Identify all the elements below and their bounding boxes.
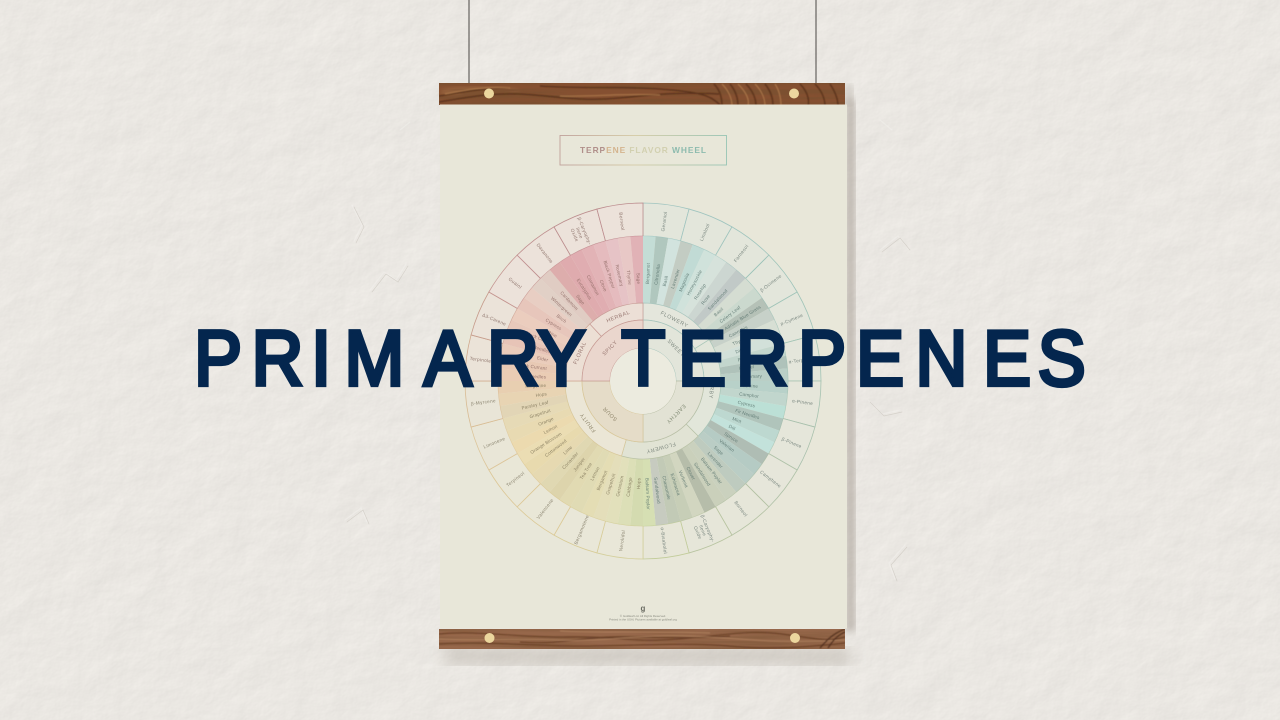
middle ring: flavor segments: Fennel bbox=[739, 364, 754, 371]
middle ring: flavor segments: Needles bbox=[528, 374, 547, 379]
middle ring: flavor segments: Clover bbox=[685, 466, 697, 481]
middle ring: flavor segments: Birch bbox=[556, 313, 568, 324]
middle ring: flavor segments: Black Currant bbox=[525, 330, 555, 347]
middle ring: flavor segments: Tangerine bbox=[524, 383, 546, 389]
outer ring: terpene segments: p-Cymene bbox=[780, 313, 804, 326]
middle ring: flavor segments: Coriander bbox=[561, 451, 580, 470]
middle ring: flavor segments: Lemon bbox=[589, 466, 601, 481]
middle ring: flavor segments: Balsam Poplar bbox=[700, 457, 723, 485]
category ring: HERBY bbox=[707, 377, 715, 399]
flavor wheel bbox=[459, 197, 827, 565]
middle ring: flavor segments: Celery Leaf bbox=[719, 304, 742, 324]
outer ring: terpene segments: α-Pinene bbox=[792, 398, 814, 406]
middle ring: flavor segments bbox=[497, 235, 789, 527]
middle ring: flavor segments: Cardamom bbox=[559, 290, 579, 311]
outer ring: terpene segments: α-Terpinene bbox=[788, 356, 817, 365]
category ring: FLOWERY bbox=[645, 440, 676, 454]
middle ring: flavor segments: Rosehip bbox=[693, 283, 707, 301]
middle ring: flavor segments: Honeysuckle bbox=[686, 269, 703, 296]
middle ring: flavor segments: Citronella bbox=[653, 264, 661, 285]
middle ring: flavor segments: Clove bbox=[599, 279, 608, 293]
middle ring: flavor segments: Sandalwood bbox=[653, 477, 661, 504]
middle ring: flavor segments: Valerian bbox=[718, 438, 736, 453]
middle ring: flavor segments: Sandalwood bbox=[693, 462, 712, 487]
outer ring: terpene segments: Camphene bbox=[759, 469, 782, 489]
outer ring: terpene segments: Oxide bbox=[570, 228, 579, 243]
middle ring: flavor segments: Parsley Leaf bbox=[521, 400, 549, 411]
outer ring: terpene segments: Borneol bbox=[733, 500, 748, 518]
middle ring: flavor segments: Bergamot bbox=[596, 469, 609, 491]
middle ring: flavor segments: Grapefruit bbox=[605, 472, 617, 495]
middle ring: flavor segments: Thyme bbox=[626, 270, 633, 285]
outer ring: terpene segments: Nerolidol bbox=[618, 530, 626, 551]
middle ring: flavor segments: Chamomile bbox=[661, 475, 672, 501]
core ring: spicy sweet earthy sour bbox=[582, 320, 704, 442]
middle ring: flavor segments: Cypress bbox=[545, 317, 563, 331]
middle ring: flavor segments: Sandalwood bbox=[707, 288, 729, 311]
middle ring: flavor segments: Camphor bbox=[739, 391, 760, 399]
outer ring: terpene segments: Terpineol bbox=[505, 471, 526, 488]
outer ring: terpene segments: β-Pinene bbox=[781, 436, 803, 449]
middle ring: flavor segments: Rosemary bbox=[740, 373, 763, 379]
middle ring: flavor segments: Jasmine bbox=[740, 383, 758, 389]
middle ring: flavor segments: Juniper bbox=[572, 456, 586, 472]
middle ring: flavor segments: Dill bbox=[728, 424, 736, 431]
category ring bbox=[565, 303, 721, 459]
outer ring: terpene segments: α-Bisabolol bbox=[660, 527, 668, 554]
core ring: spicy sweet earthy sour: EARTHY bbox=[665, 403, 687, 425]
outer ring: terpene segments: Guaiol bbox=[508, 276, 523, 290]
middle ring: flavor segments: Cypress bbox=[737, 400, 756, 409]
outer ring: terpene segments: Farnesol bbox=[733, 244, 749, 263]
middle ring: flavor segments: Cinnamon bbox=[586, 274, 600, 296]
middle ring: flavor segments: Sage bbox=[636, 273, 641, 284]
middle ring: flavor segments: Orange bbox=[538, 416, 555, 427]
middle ring: flavor segments: Basil bbox=[662, 275, 669, 287]
outer ring: terpene segments: β-Caryophy- bbox=[700, 514, 716, 543]
middle ring: flavor segments: Adriatic Blue Grass bbox=[724, 304, 762, 331]
outer ring: terpene segments: Valencene bbox=[536, 498, 555, 520]
core ring: spicy sweet earthy sour: SWEET bbox=[666, 339, 686, 358]
middle ring: flavor segments: Lavender bbox=[707, 451, 724, 470]
main heading: PRIMARY TERPENES bbox=[194, 314, 1086, 402]
outer ring: terpene segments: llene bbox=[575, 227, 584, 239]
bottom wooden rail bbox=[439, 629, 845, 649]
brass pin right bbox=[790, 633, 800, 643]
outer ring: terpene segments: Limonene bbox=[483, 436, 506, 450]
middle ring: flavor segments: Dill bbox=[735, 348, 743, 354]
outer ring: terpene segments: Δ3-Carene bbox=[482, 312, 507, 327]
copyright lines: © Goldleaf Ltd. All Rights Reserved. bbox=[620, 614, 666, 618]
outer ring: terpene segments: Linalool bbox=[699, 223, 711, 242]
middle ring: flavor segments: Elder bbox=[537, 355, 549, 363]
core ring: spicy sweet earthy sour: SOUR bbox=[602, 405, 619, 422]
outer ring: terpene segments: β-Caryophy- bbox=[577, 217, 592, 246]
category ring: HERBAL bbox=[606, 310, 631, 324]
middle ring: flavor segments: Grapefruit bbox=[529, 408, 552, 419]
category ring: FLORAL bbox=[573, 341, 588, 365]
poster footer bbox=[609, 604, 677, 622]
outer ring: terpene segments: β-Myrcene bbox=[471, 398, 496, 406]
middle ring: flavor segments: Hops bbox=[535, 391, 548, 398]
poster shadow bbox=[445, 85, 855, 664]
middle ring: flavor segments: Eucalyptus bbox=[576, 278, 593, 301]
poster sheet bbox=[440, 104, 847, 628]
outer ring: terpene segments: β-Ocimene bbox=[759, 273, 783, 293]
core ring: spicy sweet earthy sour: SPICY bbox=[602, 340, 619, 357]
outer ring: terpene segments: Terpinolene bbox=[469, 356, 497, 364]
middle ring: flavor segments: Geranium bbox=[615, 475, 625, 497]
middle ring: flavor segments: Rose bbox=[700, 293, 711, 306]
category ring: FLOWERY bbox=[659, 310, 689, 330]
wheel center bbox=[610, 348, 676, 414]
middle ring: flavor segments: Needles bbox=[533, 344, 552, 355]
outer ring: terpene segments: Oxide bbox=[693, 525, 703, 540]
middle ring: flavor segments: Bergamot bbox=[645, 262, 651, 284]
middle ring: flavor segments: Cottonwood bbox=[544, 438, 568, 458]
brass pin left bbox=[484, 88, 494, 98]
middle ring: flavor segments: Echinacea bbox=[670, 473, 681, 496]
print line: Printed in the USA | Pictures available at goldleaf.org bbox=[609, 618, 677, 622]
outer ring: terpene segments bbox=[459, 197, 827, 565]
logo mark: g bbox=[641, 604, 646, 613]
outer ring: terpene segments: Davanone bbox=[536, 242, 554, 264]
middle ring: flavor segments: Thyme bbox=[732, 336, 748, 346]
middle ring: flavor segments: Orange Blossom bbox=[529, 431, 563, 455]
middle ring: flavor segments: Sage bbox=[713, 445, 725, 456]
middle ring: flavor segments: Mint bbox=[732, 416, 743, 424]
middle ring: flavor segments: Lime bbox=[562, 445, 574, 456]
middle ring: flavor segments: Spruce bbox=[723, 431, 739, 444]
middle ring: flavor segments: Parsley bbox=[737, 354, 755, 363]
outer ring: terpene segments: Geraniol bbox=[660, 211, 668, 232]
brass pin right bbox=[789, 88, 799, 98]
middle ring: flavor segments: Black Currant bbox=[517, 362, 548, 371]
outer ring: terpene segments: Borneol bbox=[618, 212, 625, 231]
category ring: FRUITY bbox=[579, 411, 598, 433]
outer ring: terpene segments: Bergamotene bbox=[573, 514, 590, 545]
poster title box bbox=[560, 136, 726, 165]
poster title text: TERPENE FLAVOR WHEEL bbox=[580, 145, 706, 155]
middle ring: flavor segments: Hops bbox=[636, 477, 641, 489]
middle ring: flavor segments: Rosemary bbox=[615, 264, 624, 287]
middle ring: flavor segments: Lemon bbox=[543, 424, 558, 435]
middle ring: flavor segments: Magnolia bbox=[678, 272, 690, 292]
middle ring: flavor segments: Fir Needles bbox=[735, 408, 761, 420]
middle ring: flavor segments: Pine bbox=[547, 330, 558, 339]
brass pin left bbox=[484, 633, 494, 643]
top wooden rail bbox=[439, 83, 845, 106]
middle ring: flavor segments: Verbena bbox=[678, 470, 689, 489]
middle ring: flavor segments: Tea Tree bbox=[579, 461, 593, 480]
middle ring: flavor segments: Cannabis bbox=[728, 324, 749, 339]
middle ring: flavor segments: Sage bbox=[575, 294, 586, 306]
hanging wires bbox=[469, 0, 816, 83]
outer ring: terpene segments: llene bbox=[698, 524, 707, 537]
middle ring: flavor segments: Basil bbox=[713, 307, 724, 317]
middle ring: flavor segments: Wintergreen bbox=[550, 296, 573, 318]
middle ring: flavor segments: Black Pepper bbox=[602, 260, 616, 290]
middle ring: flavor segments: Balsam Poplar bbox=[645, 478, 651, 510]
middle ring: flavor segments: Lavender bbox=[670, 268, 681, 289]
middle ring: flavor segments: Cabbage bbox=[625, 477, 633, 497]
